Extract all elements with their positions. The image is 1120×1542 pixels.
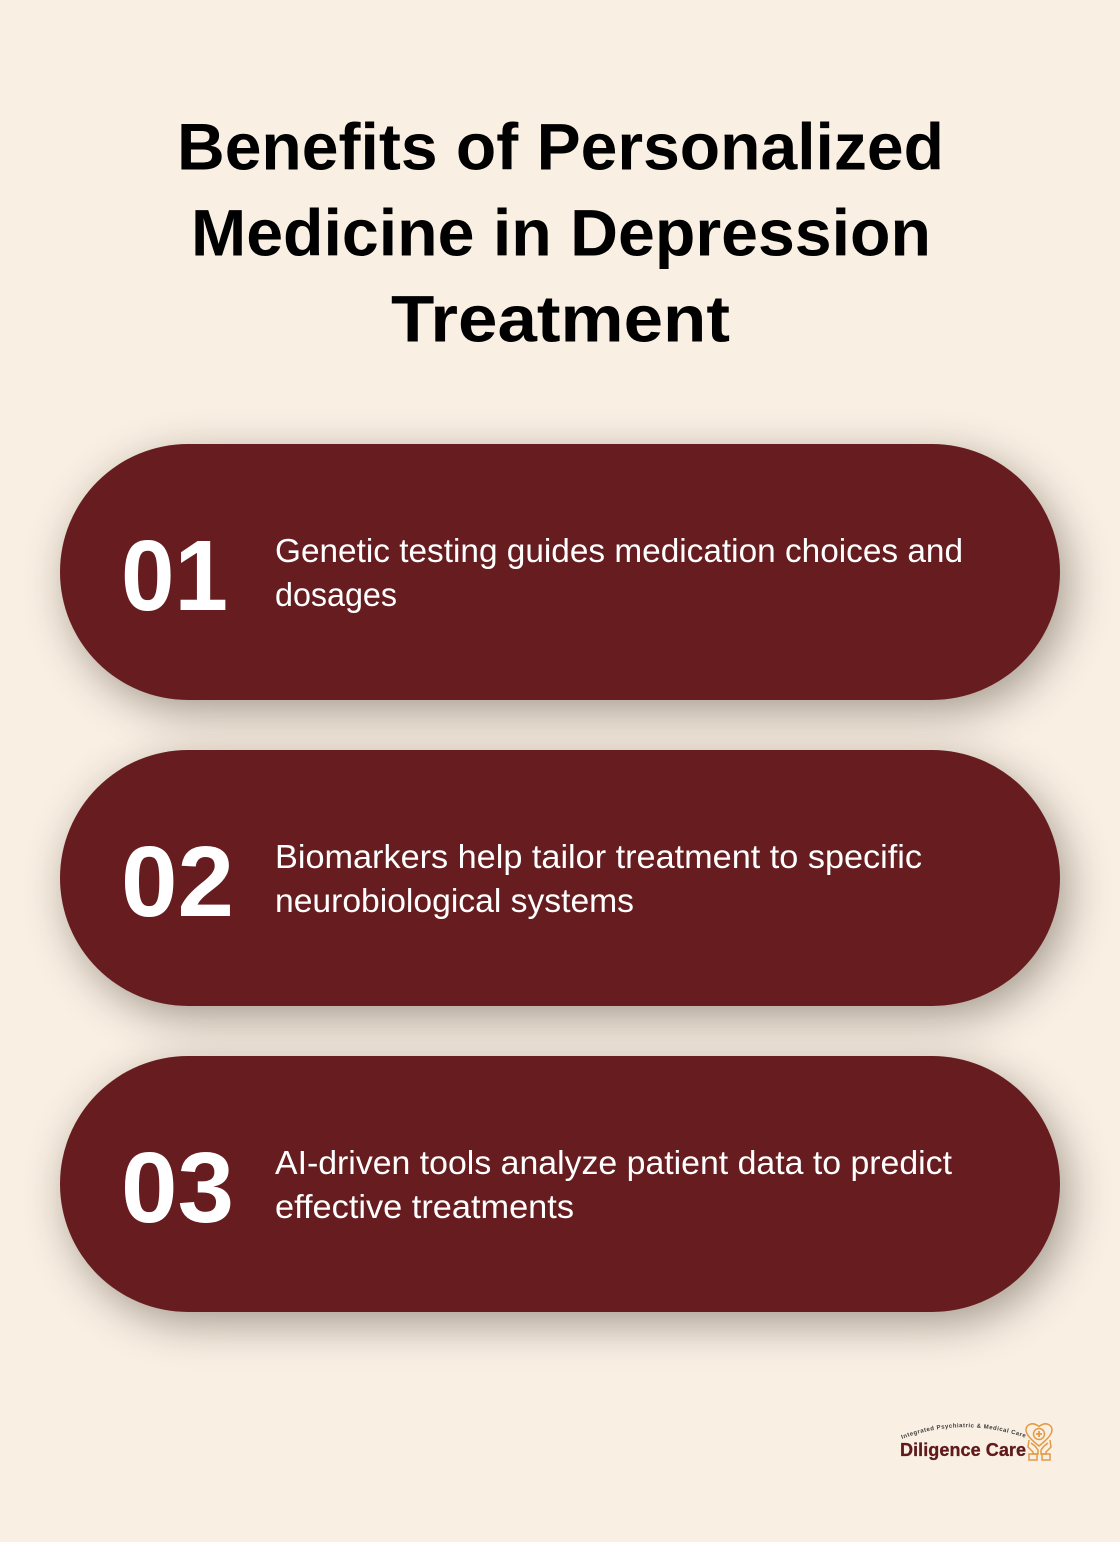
step 3 text: AI-driven tools analyze patient data to predict — [275, 1144, 952, 1181]
panel: step 3 pill — [60, 1056, 1060, 1312]
number 01: 01 — [121, 520, 228, 632]
panel: step 1 pill — [60, 444, 1060, 700]
step 1 text: Genetic testing guides medication choices and — [275, 532, 963, 569]
number 02: 02 — [121, 826, 234, 938]
step 1 text: dosages — [275, 576, 397, 613]
step 3 text: effective treatments — [275, 1188, 574, 1225]
logo name: Diligence Care — [900, 1440, 1026, 1460]
title: Benefits of Personalized — [177, 110, 944, 184]
step 2 text: neurobiological systems — [275, 882, 634, 919]
icon: heart in hands — [1026, 1424, 1052, 1460]
step 2 text: Biomarkers help tailor treatment to specific — [275, 838, 922, 875]
panel: step 2 pill — [60, 750, 1060, 1006]
logo tagline: Integrated Psychiatric & Medical Care — [900, 1422, 1026, 1439]
number 03: 03 — [121, 1132, 234, 1244]
step 2 text — [275, 838, 922, 919]
title: Treatment — [391, 282, 730, 356]
step 1 text — [275, 532, 963, 613]
title: Medicine in Depression — [191, 196, 931, 270]
step 3 text — [275, 1144, 952, 1225]
title — [177, 110, 944, 356]
logo: Diligence Care — [900, 1422, 1053, 1461]
